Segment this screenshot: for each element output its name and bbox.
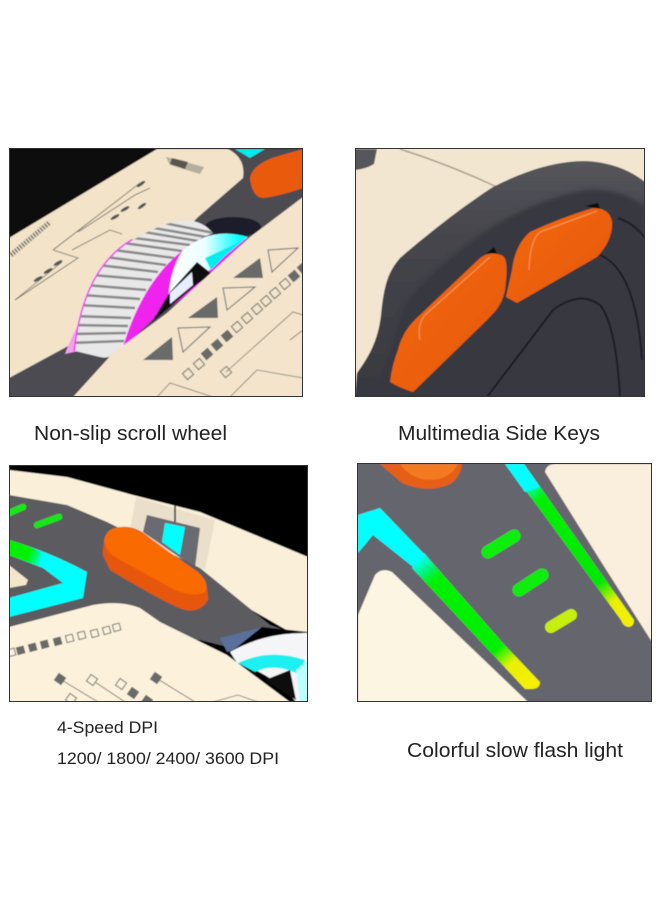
icon: orange button top xyxy=(250,149,303,198)
cream rear band xyxy=(9,470,308,632)
cream right plate xyxy=(545,464,652,642)
panel: four-speed DPI button photo xyxy=(7,465,308,707)
circuit diamonds xyxy=(54,672,258,701)
text: DPI values: 1200/ 1800/ 2400/ 3600 DPI xyxy=(57,750,279,768)
icon: orange side key front xyxy=(390,253,507,392)
small cream notch xyxy=(9,565,28,588)
icon: orange button bottom xyxy=(380,464,462,489)
dark side arch xyxy=(355,161,645,397)
triangles xyxy=(143,248,298,360)
dark track under the wheel xyxy=(9,149,303,397)
cyan chevron light xyxy=(9,540,87,617)
ribbed tread xyxy=(74,220,214,358)
dpi housing xyxy=(130,497,215,570)
panel: non-slip scroll wheel photo xyxy=(9,148,309,397)
rainbow light strip left xyxy=(412,553,540,689)
shell seam xyxy=(400,149,497,187)
barcode mark xyxy=(166,157,204,174)
icon: orange side key rear xyxy=(506,208,612,303)
panel: colorful flash light photo xyxy=(357,463,652,702)
lower beige shell xyxy=(73,197,303,397)
dark wheel well xyxy=(205,217,261,237)
wheel opening xyxy=(152,262,212,322)
slot shadows xyxy=(486,203,600,256)
icon: orange DPI button xyxy=(103,527,208,611)
grey centre body xyxy=(9,495,290,650)
upper beige shell xyxy=(9,149,243,378)
green pills xyxy=(9,507,59,525)
groove lines xyxy=(487,218,645,397)
cyan light top xyxy=(235,149,265,158)
green and yellow pills xyxy=(488,536,571,627)
heading: 4-speed DPI: 4-Speed DPI xyxy=(57,719,158,737)
lower shell circuit lines xyxy=(157,312,303,397)
cyan dpi light xyxy=(162,523,185,555)
upper shell circuit lines xyxy=(15,183,150,300)
upper shell dark marks xyxy=(33,180,147,283)
scroll wheel corner xyxy=(227,627,308,702)
heading: colorful slow flash light: Colorful slow flash light xyxy=(407,740,623,762)
top left dark notch xyxy=(355,149,377,170)
square indicator row xyxy=(182,262,309,380)
square indicator row xyxy=(7,623,121,657)
wheel side xyxy=(122,235,248,349)
hatch mark xyxy=(11,222,50,255)
heading: non-slip scroll wheel: Non-slip scroll wheel xyxy=(34,423,227,445)
scroll wheel xyxy=(64,220,248,358)
magenta glow xyxy=(64,328,78,355)
cyan top chevron xyxy=(358,508,432,570)
lower cream plate xyxy=(9,603,290,702)
dpi antenna line xyxy=(174,505,176,522)
heading: multimedia side keys: Multimedia Side Keys xyxy=(398,423,600,445)
panel: multimedia side keys photo xyxy=(355,148,645,397)
rainbow light strip right xyxy=(505,464,634,627)
wheel socket xyxy=(220,627,263,652)
cream left plate xyxy=(358,570,528,702)
